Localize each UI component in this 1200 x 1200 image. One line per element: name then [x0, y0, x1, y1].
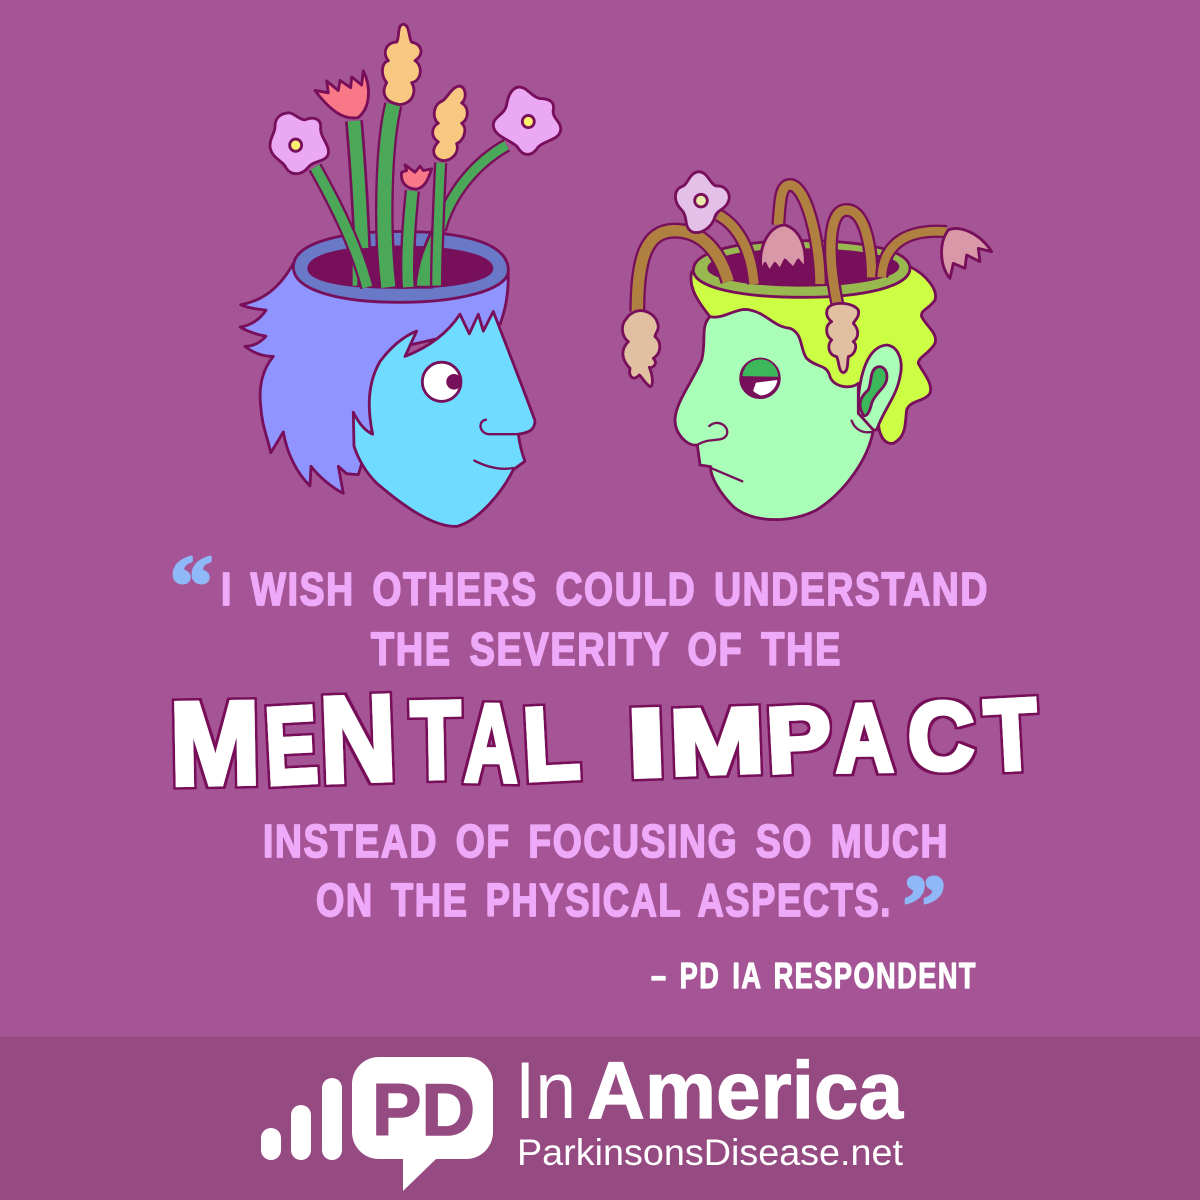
headline: mental impact: P — [764, 687, 834, 793]
hair — [691, 267, 936, 443]
small tulip — [401, 165, 432, 189]
right flower — [493, 87, 561, 154]
quote: closing mark: ” — [903, 857, 946, 953]
nose, ear crease and mouth — [697, 421, 873, 481]
head opening interior — [307, 246, 493, 289]
logo: wordmark: In — [515, 1046, 576, 1136]
wilted stems — [637, 185, 947, 312]
head opening rim — [693, 241, 910, 297]
tall orange grain — [382, 24, 421, 105]
head opening interior — [707, 248, 899, 287]
headline: mental impact: N — [318, 670, 398, 808]
headline: mental impact: M — [668, 689, 766, 795]
logo: speech bubble with PD: PD — [372, 1070, 475, 1151]
headline: mental impact: I — [625, 689, 668, 798]
nose and mouth — [474, 420, 518, 469]
drooping centre bloom — [761, 225, 805, 272]
short orange grain — [433, 86, 467, 161]
logo: wordmark: America — [587, 1046, 904, 1136]
ear — [858, 345, 901, 430]
headline: mental impact: E — [262, 684, 320, 808]
face — [353, 311, 535, 526]
headline: mental impact: T — [982, 678, 1040, 792]
dried grain right — [827, 303, 859, 373]
face — [675, 309, 873, 520]
hair — [240, 264, 508, 493]
footer band — [0, 1037, 1200, 1200]
illustration: happy head with blooming flowers — [240, 24, 561, 526]
head opening rim — [293, 231, 508, 302]
large tulip — [315, 71, 369, 118]
faded flower — [675, 172, 729, 233]
logo: wordmark — [515, 1046, 904, 1173]
eye — [422, 362, 462, 401]
quote: first lines: I WISH OTHERS COULD UNDERSTAND — [221, 563, 989, 615]
headline: mental impact: C — [908, 683, 974, 790]
quote: first lines — [221, 563, 989, 675]
headline: mental impact — [169, 670, 1040, 811]
headline: mental impact: L — [520, 685, 582, 802]
logo: speech bubble with PD — [352, 1057, 493, 1191]
ear interior — [860, 367, 887, 416]
dried grain left — [622, 311, 660, 387]
drooping right bloom — [942, 229, 992, 278]
eye — [741, 359, 779, 398]
quote: closing lines — [263, 815, 949, 926]
quote: opening mark: “ — [170, 537, 213, 633]
quote: closing lines: INSTEAD OF FOCUSING SO MUCH — [263, 815, 949, 867]
logo: signal bars — [261, 1078, 342, 1160]
logo: wordmark: ParkinsonsDisease.net — [517, 1132, 904, 1173]
headline: mental impact: M — [169, 677, 261, 811]
left flower — [270, 113, 329, 174]
attribution: – PD IA RESPONDENT — [651, 955, 977, 996]
headline: mental impact: A — [464, 682, 519, 805]
headline: mental impact: T — [410, 679, 462, 802]
stems — [315, 105, 507, 287]
quote: closing lines: ON THE PHYSICAL ASPECTS. — [316, 874, 892, 926]
headline: mental impact: A — [835, 685, 894, 792]
illustration: sad head with wilted flowers — [622, 172, 992, 520]
quote: first lines: THE SEVERITY OF THE — [371, 623, 842, 675]
